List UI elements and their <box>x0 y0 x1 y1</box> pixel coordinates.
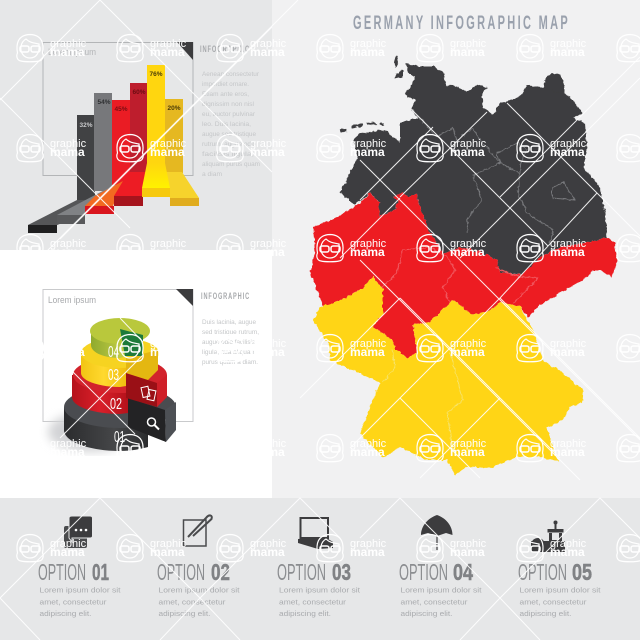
bar 32% <box>28 115 95 233</box>
watermark logos: mama <box>150 545 185 559</box>
bar 45%: 45% <box>114 106 128 113</box>
watermark logos: graphic <box>250 238 287 250</box>
bar 60% <box>114 83 148 206</box>
watermark logos: mama <box>150 345 185 359</box>
watermark logos: mama <box>250 245 285 259</box>
map: central red region <box>310 192 617 358</box>
chart side paragraph <box>202 72 260 178</box>
description <box>158 586 240 618</box>
watermark logos: mama <box>250 545 285 559</box>
watermark logos: graphic <box>350 238 387 250</box>
watermark logos: graphic <box>150 438 187 450</box>
description <box>400 586 482 618</box>
watermark logos: mama <box>50 445 85 459</box>
watermark logos: graphic <box>250 138 287 150</box>
panel: bar chart infographic <box>28 42 260 233</box>
option 05 <box>518 520 600 618</box>
option 03: 03 <box>332 559 351 585</box>
heading: OPTION <box>38 559 86 585</box>
icon: note with paperclip <box>184 515 212 546</box>
option 04: 04 <box>453 559 473 585</box>
watermark logos: graphic <box>450 338 487 350</box>
watermark logos: graphic <box>50 38 87 50</box>
description <box>40 586 120 618</box>
watermark logos: graphic <box>250 38 287 50</box>
description: adipiscing elit. <box>400 609 452 618</box>
chart side paragraph: Aenean consectetur <box>202 72 259 78</box>
description: adipiscing elit. <box>158 609 210 618</box>
watermark logos: mama <box>250 445 285 459</box>
heading: OPTION <box>399 559 448 585</box>
chart side paragraph: a diam <box>202 172 222 178</box>
watermark logos: graphic <box>550 338 587 350</box>
germany map <box>310 55 617 475</box>
watermark logos: graphic <box>550 38 587 50</box>
bar 76% <box>142 65 170 197</box>
description: Lorem ipsum dolor sit <box>158 586 240 594</box>
description: Lorem ipsum dolor sit <box>40 586 120 594</box>
watermark logos: mama <box>450 545 485 559</box>
watermark logos: mama <box>250 45 285 59</box>
description: adipiscing elit. <box>520 609 572 618</box>
watermark logos: graphic <box>450 538 487 550</box>
pyramid side paragraph: sed tristique rutrum, <box>202 330 259 336</box>
layer 04 green: 04 <box>108 344 119 361</box>
description: Lorem ipsum dolor sit <box>520 586 600 594</box>
watermark logos: mama <box>350 545 385 559</box>
layer 04 green <box>90 318 150 361</box>
bar 54%: 54% <box>97 99 111 106</box>
option 05: 05 <box>572 559 592 585</box>
description <box>520 586 600 618</box>
watermark logos: mama <box>150 145 185 159</box>
watermark logos: mama <box>550 245 585 259</box>
watermark logos: mama <box>250 145 285 159</box>
icon: magnifier <box>148 418 159 430</box>
watermark logos: mama <box>150 245 185 259</box>
layer 01 black: 01 <box>114 429 125 446</box>
pyramid frame <box>43 290 193 422</box>
pyramid side paragraph: Duis lacinia, augue <box>202 320 257 326</box>
watermark logos: graphic <box>250 438 287 450</box>
pyramid side heading: INFOGRAPHIC <box>201 291 250 302</box>
option 03 <box>277 518 360 618</box>
watermark logos: mama <box>150 445 185 459</box>
watermark logos: graphic <box>350 538 387 550</box>
watermark logos: graphic <box>550 438 587 450</box>
chart side paragraph: rutrum, augue odio <box>202 142 257 148</box>
icon: chat bubbles <box>64 516 92 548</box>
chart corner tab <box>177 42 193 60</box>
option 02 <box>157 515 240 618</box>
icon: umbrella <box>421 515 452 550</box>
chart side paragraph: imperdiet ornare. <box>202 82 249 88</box>
watermark logos: mama <box>350 45 385 59</box>
description: adipiscing elit. <box>40 609 92 618</box>
icon: tower machine <box>531 520 565 552</box>
watermark logos: mama <box>550 45 585 59</box>
watermark logos: mama <box>50 545 85 559</box>
chart side heading: INFOGRAPHIC <box>200 44 250 55</box>
icon: laptop <box>298 518 333 549</box>
description: amet, consectetur <box>520 598 587 606</box>
heading: OPTION <box>157 559 205 585</box>
pyramid side paragraph: purus quam a diam. <box>202 360 258 366</box>
icon: cards <box>141 386 156 401</box>
layer 01 black <box>64 386 176 451</box>
watermark logos: graphic <box>450 38 487 50</box>
bar 76%: 76% <box>149 71 163 78</box>
watermark logos: graphic <box>550 538 587 550</box>
watermark logos: mama <box>450 345 485 359</box>
option 04 <box>399 515 482 618</box>
layer 02 red: 02 <box>110 396 122 413</box>
watermark logos: mama <box>550 445 585 459</box>
description <box>279 586 360 618</box>
chart frame <box>43 42 193 176</box>
watermark logos: mama <box>250 345 285 359</box>
watermark logos: graphic <box>450 238 487 250</box>
description: amet, consectetur <box>158 598 226 606</box>
bar 20% <box>165 99 199 206</box>
option 01: 01 <box>92 559 109 585</box>
heading: OPTION <box>518 559 567 585</box>
watermark logos: graphic <box>550 238 587 250</box>
watermark logos: graphic <box>250 538 287 550</box>
bar 20%: 20% <box>167 105 181 112</box>
chart caption: Lorem ipsum <box>48 47 96 58</box>
watermark logos: mama <box>50 45 85 59</box>
panel: stacked cylinder infographic <box>43 289 259 452</box>
watermark logos: graphic <box>150 538 187 550</box>
watermark logos: graphic <box>350 38 387 50</box>
watermark logos: graphic <box>150 338 187 350</box>
watermark logos: graphic <box>150 138 187 150</box>
pyramid caption: Lorem ipsum <box>48 295 96 306</box>
description: amet, consectetur <box>279 598 347 606</box>
watermark logos: graphic <box>50 238 87 250</box>
pyramid side paragraph: ligula, cua aliquam <box>202 350 256 356</box>
description: Lorem ipsum dolor sit <box>400 586 482 594</box>
option 01 <box>38 516 120 618</box>
watermark logos: mama <box>550 145 585 159</box>
watermark logos: mama <box>550 545 585 559</box>
watermark logos: mama <box>350 145 385 159</box>
bar 32%: 32% <box>79 122 93 129</box>
watermark logos: graphic <box>250 338 287 350</box>
watermark logos: graphic <box>50 138 87 150</box>
heading: OPTION <box>277 559 326 585</box>
map: north dark region <box>340 55 607 275</box>
watermark logos: mama <box>50 245 85 259</box>
chart side paragraph: augue sed tristique <box>202 132 257 138</box>
watermark logos: graphic <box>350 338 387 350</box>
watermark logos: mama <box>350 445 385 459</box>
chart side paragraph: leo. Duis lacinia, <box>202 122 251 128</box>
watermark logos: graphic <box>150 38 187 50</box>
watermark logos: graphic <box>450 438 487 450</box>
watermark logos: mama <box>450 145 485 159</box>
description: amet, consectetur <box>400 598 468 606</box>
chart side paragraph: dignissim non nisl <box>202 102 254 108</box>
watermark logos: graphic <box>50 438 87 450</box>
watermark logos: graphic <box>550 138 587 150</box>
chart side paragraph: facilisis ligula, <box>202 152 254 158</box>
chart side paragraph: Etiam ante eros, <box>202 92 249 98</box>
watermark logos: mama <box>450 45 485 59</box>
watermark logos: graphic <box>350 138 387 150</box>
layer 03 yellow: 03 <box>108 367 119 384</box>
watermark logos: mama <box>50 345 85 359</box>
description: Lorem ipsum dolor sit <box>279 586 360 594</box>
map: south yellow region <box>313 277 583 475</box>
chart side paragraph: eu, auctor pulvinar <box>202 112 255 118</box>
description: adipiscing elit. <box>279 609 331 618</box>
watermark logos: mama <box>350 345 385 359</box>
bar 60%: 60% <box>132 89 146 96</box>
watermark logos: graphic <box>50 538 87 550</box>
watermark logos: mama <box>550 345 585 359</box>
bar 45% <box>85 100 130 214</box>
watermark logos: graphic <box>450 138 487 150</box>
pyramid side paragraph: augue odio facilisis <box>202 340 255 346</box>
layer 02 red <box>72 357 167 414</box>
pyramid side paragraph <box>202 320 259 366</box>
chart side paragraph: aliquam purus quam <box>202 162 260 168</box>
watermark logos: mama <box>350 245 385 259</box>
watermark logos: graphic <box>150 238 187 250</box>
watermark logos: mama <box>150 45 185 59</box>
bar 54% <box>57 93 122 224</box>
description: amet, consectetur <box>40 598 107 606</box>
layer 03 yellow <box>81 338 159 387</box>
pyramid corner tab <box>176 289 193 306</box>
watermark logos: graphic <box>350 438 387 450</box>
option 02: 02 <box>211 559 230 585</box>
pyramid shadow <box>48 412 132 452</box>
watermark logos: graphic <box>50 338 87 350</box>
watermark logos: mama <box>50 145 85 159</box>
watermark logos: mama <box>450 245 485 259</box>
watermark logos: mama <box>450 445 485 459</box>
